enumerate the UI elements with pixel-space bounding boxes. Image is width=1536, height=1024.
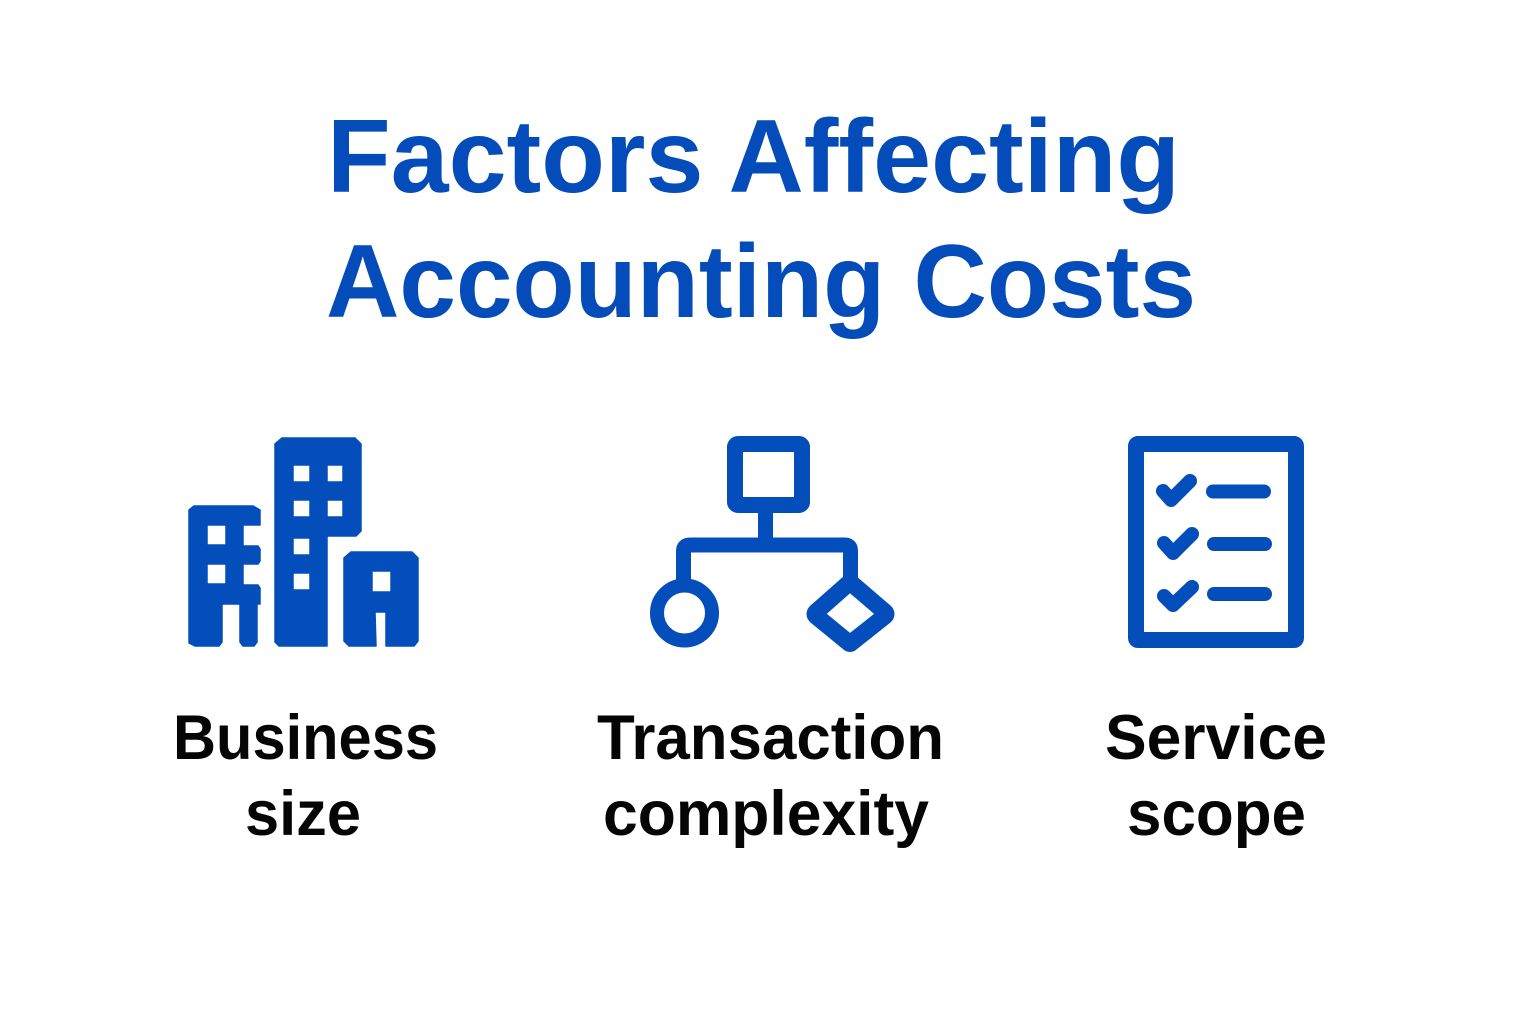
label: transaction complexity: complexity bbox=[603, 779, 929, 849]
title: Factors Affecting bbox=[327, 99, 1180, 215]
icon: checklist document bbox=[1136, 444, 1296, 640]
icon: office buildings bbox=[189, 438, 418, 646]
label: business size: size bbox=[245, 779, 361, 849]
label: business size: Business bbox=[173, 703, 438, 773]
label: service scope bbox=[1105, 703, 1327, 849]
factor: business size bbox=[173, 438, 438, 849]
label: transaction complexity bbox=[597, 703, 944, 849]
label: business size bbox=[173, 703, 438, 849]
factor: transaction complexity bbox=[597, 444, 944, 849]
factor: service scope bbox=[1105, 444, 1327, 849]
title: Accounting Costs bbox=[326, 224, 1196, 340]
title bbox=[326, 99, 1196, 340]
label: transaction complexity: Transaction bbox=[597, 703, 944, 773]
icon: flowchart hierarchy bbox=[657, 444, 886, 644]
label: service scope: Service bbox=[1105, 703, 1327, 773]
label: service scope: scope bbox=[1127, 779, 1306, 849]
